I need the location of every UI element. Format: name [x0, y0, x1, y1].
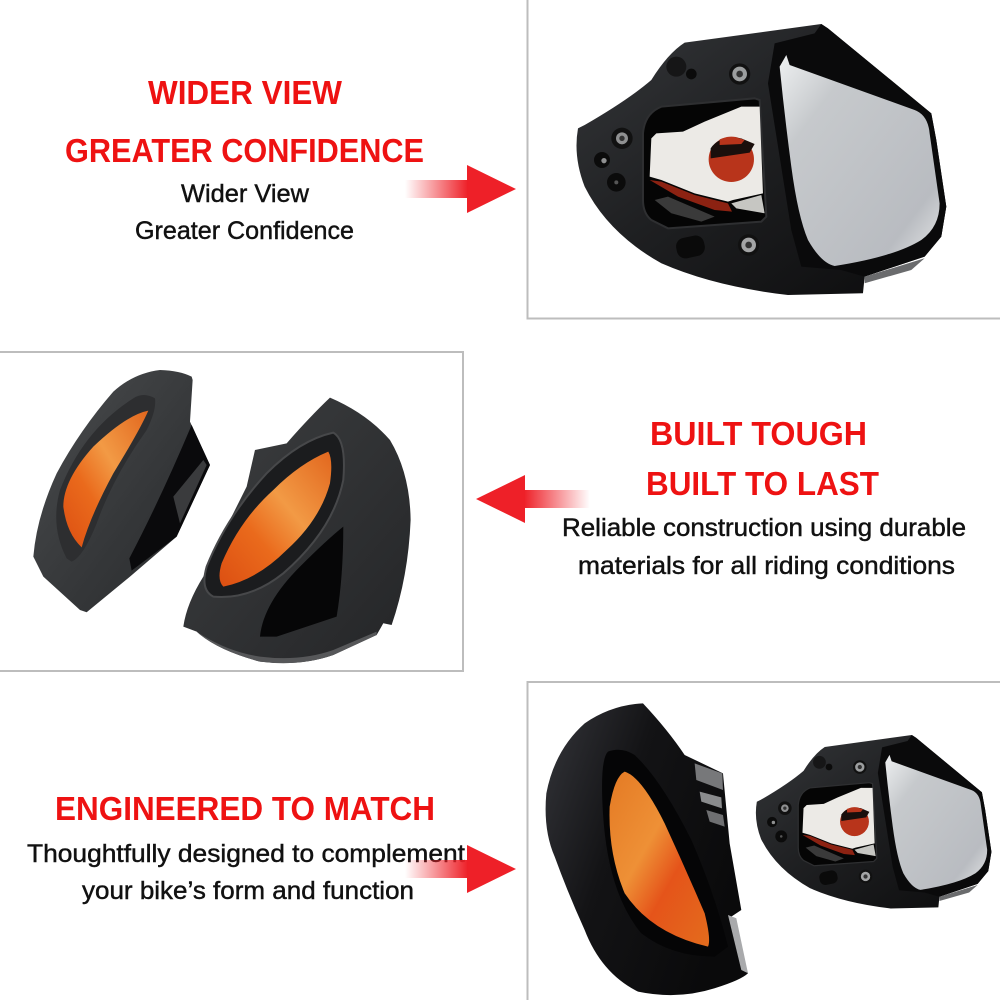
heading: built tough: BUILT TOUGH: [650, 415, 867, 452]
text block: built tough description: materials for all riding conditions: [578, 552, 955, 580]
image: mirror back with glass: [576, 24, 946, 295]
heading: wider view: [65, 74, 424, 169]
text block: wider view description: Wider View: [181, 180, 310, 208]
image: right housing with amber lens: [183, 398, 411, 663]
text block: wider view description: Greater Confidence: [135, 217, 354, 245]
panel: housing and mirror back photo: [528, 682, 1000, 1000]
text block: engineered description: your bike’s form and function: [82, 877, 414, 905]
text block: built tough description: [562, 514, 966, 580]
text block: engineered description: Thoughtfully designed to complement: [27, 840, 465, 868]
heading: engineered to match: ENGINEERED TO MATCH: [55, 790, 435, 827]
heading: built tough: BUILT TO LAST: [646, 465, 879, 502]
image: glossy black housing with amber lens: [546, 703, 748, 995]
arrow: pointing left to housings: [476, 475, 590, 523]
arrow: pointing right to mirror back: [405, 165, 516, 213]
arrow: pointing right to housing and mirror: [405, 845, 516, 893]
panel: two mirror housings photo: [0, 352, 463, 671]
image: left housing with amber lens: [33, 370, 210, 612]
image: small mirror back with glass: [756, 735, 991, 908]
panel: mirror back product photo: [528, 0, 1000, 318]
text block: wider view description: [135, 180, 354, 245]
text block: engineered description: [27, 840, 465, 905]
heading: wider view: WIDER VIEW: [148, 74, 343, 111]
text block: built tough description: Reliable construction using durable: [562, 514, 966, 542]
heading: built tough: [646, 415, 879, 502]
heading: wider view: GREATER CONFIDENCE: [65, 132, 424, 169]
